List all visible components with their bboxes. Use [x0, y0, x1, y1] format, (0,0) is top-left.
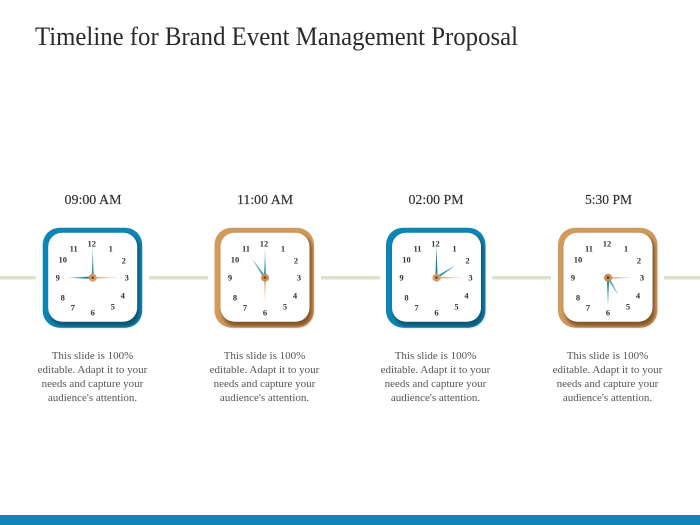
clock: 10 [574, 255, 582, 265]
clock: 12 [603, 239, 611, 249]
clock: 11 [413, 244, 422, 254]
step 4: 5:30 PM [553, 193, 663, 404]
clock: 10 [402, 255, 411, 265]
clock: 4 [293, 291, 298, 301]
footer bar [0, 515, 700, 525]
clock: 8 [404, 293, 409, 303]
clock: 1 [624, 244, 628, 254]
time label: 11:00 AM [237, 193, 294, 208]
description: This slide is 100% [224, 350, 305, 362]
time label: 02:00 PM [408, 193, 464, 208]
clock: 7 [71, 303, 76, 313]
clock: 5 [454, 302, 459, 312]
clock: 4 [464, 291, 469, 301]
description: editable. Adapt it to your [210, 364, 320, 376]
clock: 8 [576, 293, 580, 303]
title: Timeline for Brand Event Management Proposal [35, 22, 518, 51]
description: audience's attention. [220, 392, 309, 404]
clock: 3 [468, 273, 473, 283]
clock: 11 [70, 244, 78, 254]
clock: 8 [233, 293, 237, 303]
clock: 3 [297, 273, 301, 283]
description: This slide is 100% [395, 350, 476, 362]
clock: 1 [452, 244, 457, 254]
clock: 6 [263, 308, 267, 318]
clock: 7 [243, 303, 248, 313]
clock: 10 [58, 255, 67, 265]
description: needs and capture your [557, 378, 659, 390]
clock: 6 [606, 308, 610, 318]
clock: 11 [585, 244, 593, 254]
description: editable. Adapt it to your [553, 364, 663, 376]
clock: 11 [242, 244, 250, 254]
clock [43, 228, 142, 328]
clock: 2 [294, 256, 298, 266]
clock: 1 [109, 244, 113, 254]
description: needs and capture your [42, 378, 144, 390]
clock: 7 [414, 303, 419, 313]
clock: 3 [640, 273, 644, 283]
clock: 12 [87, 239, 96, 249]
description: audience's attention. [563, 392, 652, 404]
description: audience's attention. [48, 392, 137, 404]
clock: 8 [61, 293, 65, 303]
description: needs and capture your [214, 378, 316, 390]
description: editable. Adapt it to your [381, 364, 491, 376]
clock [558, 228, 658, 328]
clock: 1 [281, 244, 285, 254]
clock: 4 [121, 291, 126, 301]
clock: 9 [56, 273, 60, 283]
clock: 9 [571, 273, 575, 283]
description: audience's attention. [391, 392, 480, 404]
clock: 2 [637, 256, 641, 266]
step 3: 02:00 PM [381, 193, 491, 404]
clock: 9 [399, 273, 404, 283]
description: This slide is 100% [52, 350, 133, 362]
description: needs and capture your [385, 378, 487, 390]
clock: 2 [122, 256, 126, 266]
clock: 3 [125, 273, 129, 283]
clock: 6 [434, 308, 439, 318]
clock: 5 [626, 302, 630, 312]
clock: 2 [465, 256, 470, 266]
clock [386, 228, 486, 328]
step 1: 09:00 AM [38, 193, 148, 404]
time label: 09:00 AM [64, 193, 122, 208]
timeline connector [0, 276, 700, 280]
description: This slide is 100% [567, 350, 648, 362]
step 2: 11:00 AM [210, 193, 320, 404]
clock: 6 [91, 308, 95, 318]
clock: 10 [231, 255, 239, 265]
clock: 5 [283, 302, 287, 312]
time label: 5:30 PM [585, 193, 633, 208]
clock: 12 [431, 239, 440, 249]
clock: 4 [636, 291, 641, 301]
clock: 5 [111, 302, 115, 312]
clock [214, 228, 314, 328]
clock: 7 [586, 303, 591, 313]
description: editable. Adapt it to your [38, 364, 148, 376]
clock: 12 [260, 239, 268, 249]
clock: 9 [228, 273, 232, 283]
